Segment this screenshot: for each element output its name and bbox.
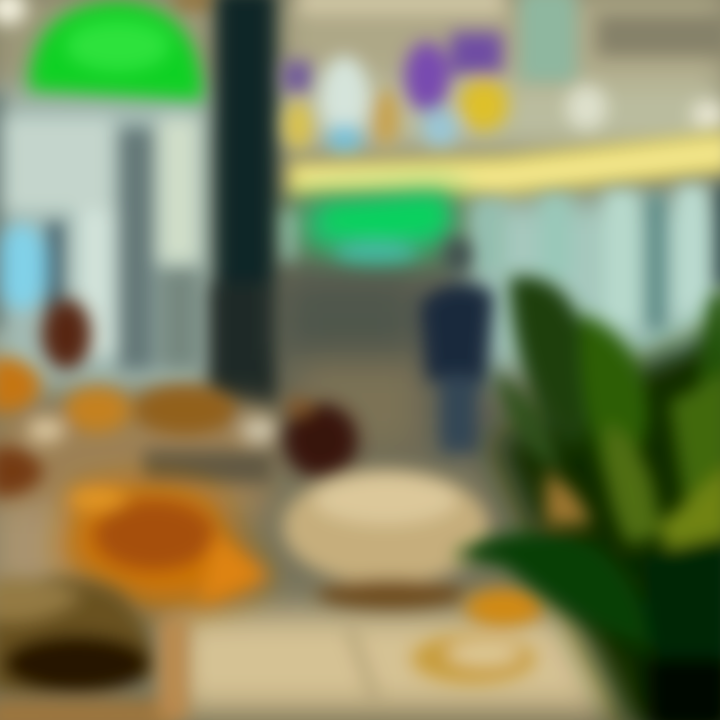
person: seated figure left xyxy=(42,299,91,369)
food: dark round pastry xyxy=(284,397,358,477)
light band: yellow counter lights xyxy=(288,131,720,195)
person: standing figure in dark clothes xyxy=(420,236,494,453)
stripes: pale blue counter front xyxy=(473,185,720,360)
plant: green leaves right xyxy=(453,276,720,720)
sign: green glow top left xyxy=(28,2,203,100)
table: foreground cream surface xyxy=(0,406,648,720)
food: plate on front table xyxy=(159,589,543,720)
floor: tiled walkway xyxy=(283,278,422,453)
pillar: dark column xyxy=(210,0,278,404)
sign: colourful menu boards xyxy=(283,32,720,153)
food: pastries on back table xyxy=(0,358,278,496)
food: orange dish xyxy=(61,484,267,608)
background: mall interior xyxy=(0,0,720,458)
food: brown bun lower left xyxy=(0,577,175,720)
sign: green counter display xyxy=(298,190,453,259)
food: cream bowl xyxy=(283,469,489,608)
storefront: glass panels left xyxy=(0,92,200,370)
